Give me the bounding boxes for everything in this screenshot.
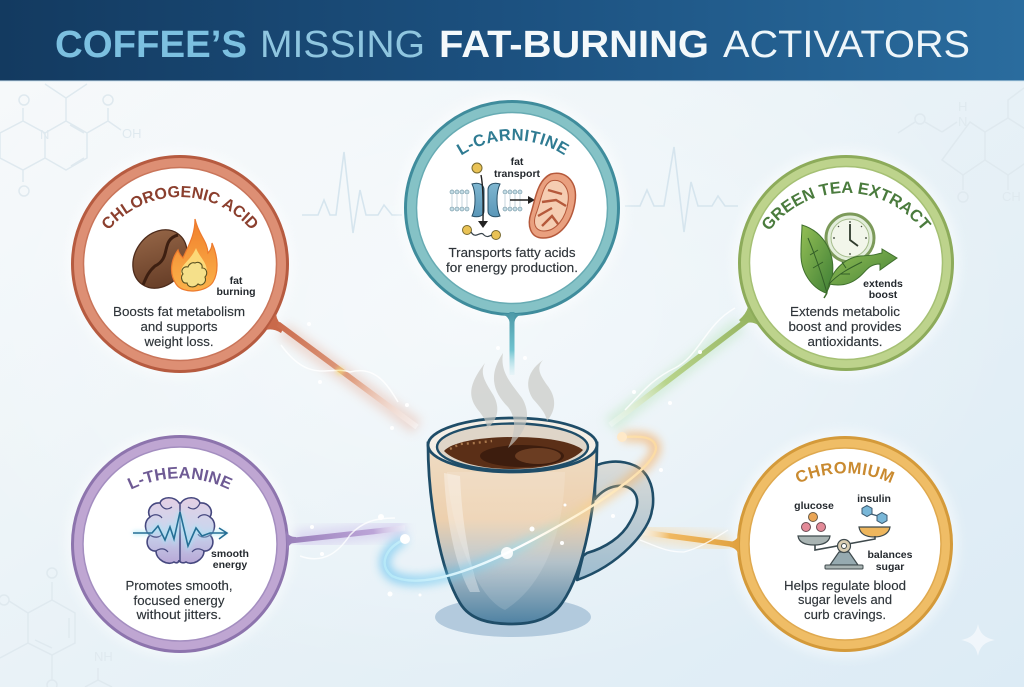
description: Extends metabolic	[790, 304, 901, 319]
icon label: fat	[511, 156, 524, 168]
description: weight loss.	[143, 334, 214, 349]
description: focused energy	[134, 593, 225, 608]
icon: brain	[145, 498, 215, 563]
title	[55, 24, 970, 66]
icon label: balances sugar	[868, 549, 913, 573]
icon label: glucose: glucose	[794, 500, 834, 512]
icon: brain wave arrow	[133, 512, 227, 546]
icon label	[211, 548, 249, 571]
icon: balance scale	[798, 512, 890, 569]
heading: L-CARNITINE	[456, 128, 570, 156]
description: for energy production.	[446, 260, 578, 275]
icon: cell membrane channel	[450, 163, 535, 240]
panel: l-carnitine	[398, 100, 626, 316]
icon label	[863, 278, 903, 301]
molecule: top right: CH	[1002, 189, 1021, 204]
icon label: transport	[494, 168, 541, 180]
molecule: top left: OH	[122, 126, 142, 141]
molecule: bottom left: NH	[94, 649, 113, 664]
icon label: fat	[230, 275, 243, 287]
icon label: energy	[213, 559, 247, 571]
connector: green tea to cup	[610, 307, 758, 425]
icon: clock	[826, 214, 874, 262]
coffee cup	[385, 353, 663, 637]
panel: green tea extract	[738, 154, 958, 373]
icon label: boost	[869, 289, 898, 301]
icon label: insulin: insulin	[857, 493, 891, 505]
description	[788, 304, 902, 349]
description: curb cravings.	[804, 607, 886, 622]
cup handle	[577, 462, 653, 580]
cup rim	[428, 418, 597, 472]
description	[113, 304, 245, 349]
molecule: top right: N	[958, 114, 967, 129]
steam	[471, 353, 554, 448]
icon label	[494, 156, 541, 180]
swirl sparkles	[388, 432, 663, 596]
molecule: bottom left	[0, 568, 113, 687]
icon label: smooth	[211, 548, 249, 560]
panel: l-theanine	[71, 435, 289, 654]
cup body	[428, 443, 597, 624]
panel: chlorogenic acid	[71, 155, 289, 373]
heading: CHROMIUM	[796, 462, 894, 483]
molecule: top right: H	[958, 99, 967, 114]
description: Boosts fat metabolism	[113, 304, 245, 319]
description: boost and provides	[788, 319, 902, 334]
title: MISSING	[260, 24, 425, 66]
description: sugar levels and	[798, 592, 892, 607]
title: ACTIVATORS	[723, 24, 970, 66]
connector: chromium to cup	[640, 530, 739, 556]
molecule: top right	[898, 88, 1024, 204]
coffee surface	[444, 437, 583, 469]
heading: L-THEANINE	[127, 466, 233, 490]
description: and supports	[140, 319, 218, 334]
description: Transports fatty acids	[448, 245, 576, 260]
heartbeat line: right	[625, 147, 738, 232]
cup shadow	[435, 597, 591, 637]
icon: tea leaves	[801, 225, 897, 298]
icon: mitochondrion	[529, 173, 575, 238]
description: Promotes smooth,	[126, 578, 232, 593]
icon label: balances sugar: sugar	[876, 561, 904, 573]
description: antioxidants.	[808, 334, 882, 349]
title: FAT-BURNING	[439, 24, 709, 66]
icon label: extends	[863, 278, 903, 290]
header band	[0, 0, 1024, 82]
icon: coffee bean	[122, 219, 198, 299]
heartbeat line: left	[302, 152, 402, 233]
icon label: burning	[216, 286, 256, 298]
swirl glow	[385, 437, 656, 581]
icon label: balances sugar: balances	[868, 549, 913, 561]
heading: GREEN TEA EXTRACT	[762, 182, 932, 229]
description: Helps regulate blood	[784, 578, 906, 593]
panel: chromium	[734, 433, 958, 657]
title: COFFEE’S	[55, 24, 247, 66]
icon: insulin molecule	[862, 506, 887, 524]
molecule: top left: N	[40, 127, 49, 142]
description	[126, 578, 232, 622]
description: without jitters.	[135, 607, 222, 622]
sparkle icon	[961, 624, 995, 656]
swirl line	[385, 437, 656, 581]
heading: CHLOROGENIC ACID	[102, 186, 258, 228]
connector: l-carnitine to cup	[496, 312, 527, 375]
description	[446, 245, 578, 275]
molecule: top left	[0, 84, 142, 196]
icon label	[216, 275, 256, 298]
icon: flame	[172, 219, 217, 291]
connector: chlorogenic acid to cup	[266, 314, 417, 430]
cup highlight	[444, 472, 565, 610]
connector: l-theanine to cup	[286, 514, 405, 559]
cup interior	[437, 424, 588, 470]
description	[784, 578, 906, 622]
